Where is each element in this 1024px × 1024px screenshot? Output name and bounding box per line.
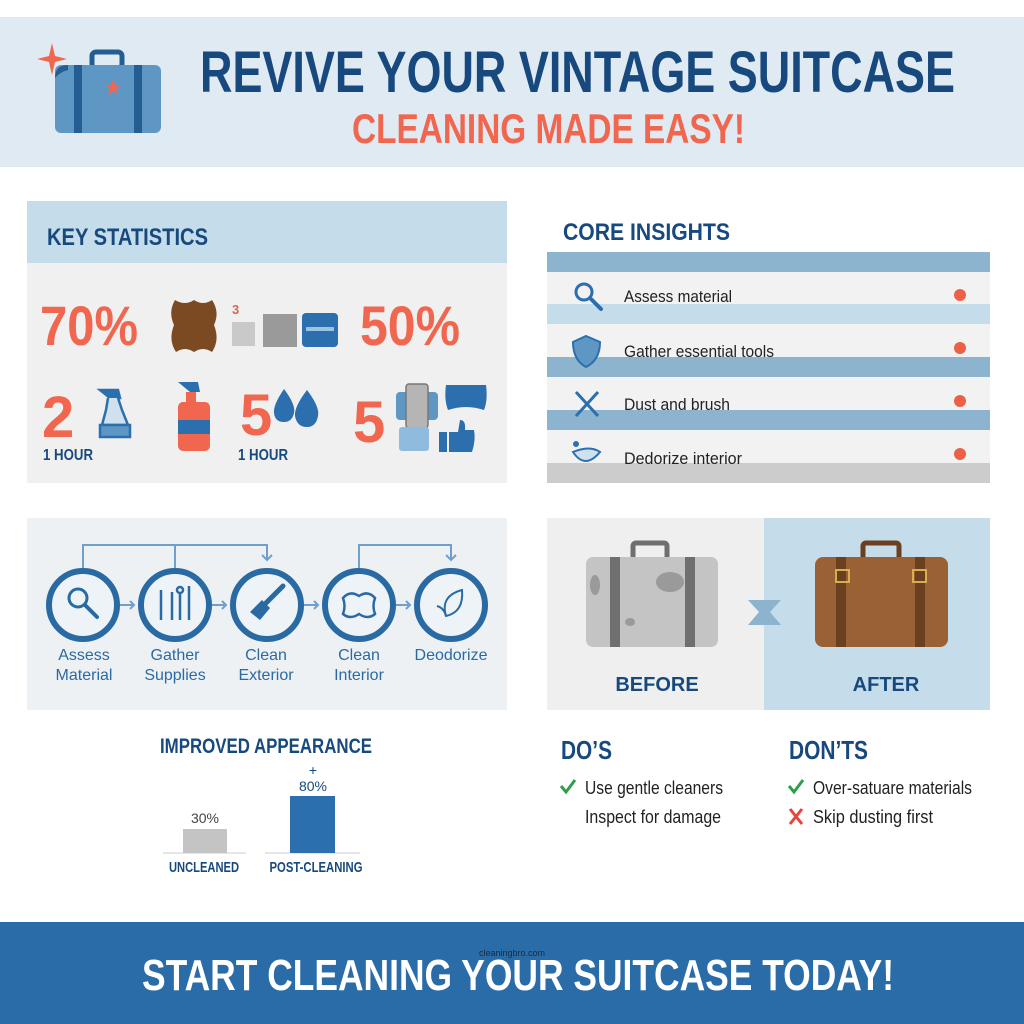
donts list: DON’TS [789,735,868,765]
stat: 2 / 1 hour: 1 HOUR [43,447,93,464]
dos list [561,735,723,827]
subtitle: CLEANING MADE EASY! [352,105,745,152]
chart: improved appearance: 30% [191,810,219,826]
insight: dust and brush [576,392,966,416]
icon: leather and materials [171,300,338,352]
step: clean interior: Interior [334,667,385,684]
step: clean exterior: Clean [245,647,287,664]
step: clean exterior: Exterior [238,667,294,684]
chart: improved appearance: POST-CLEANING [270,859,362,876]
stat: 50%: 50% [360,294,460,357]
stat: 5 tools: 5 [353,390,385,455]
dos list: DO’S [561,735,612,765]
heading: core insights: CORE INSIGHTS [563,219,730,246]
chart: improved appearance: UNCLEANED [169,859,239,876]
stat: 2 / 1 hour [42,385,93,464]
connector arrows [83,545,456,609]
insight: gather tools: Gather essential tools [624,342,774,361]
step: clean interior [325,571,393,684]
stat: 5 / 1 hour [238,383,288,464]
chart: improved appearance: + [309,762,317,778]
donts list: Over-satuare materials [813,778,972,798]
insight: gather tools [573,336,966,367]
heading: key statistics: KEY STATISTICS [47,224,208,251]
step: clean interior: Clean [338,647,380,664]
step: gather supplies: Supplies [144,667,206,684]
insight: dust and brush: Dust and brush [624,395,730,414]
after label: AFTER [853,674,920,696]
chart: improved appearance: 80% [299,778,327,794]
step: assess material: Material [56,667,112,684]
donts list [789,735,972,827]
stat: 5 / 1 hour: 1 HOUR [238,447,288,464]
insight: dedorize interior [573,441,966,468]
footer banner: cleaningbro.com [479,948,545,958]
step: clean exterior [233,571,301,684]
dos list: Inspect for damage [585,807,721,827]
before label: BEFORE [615,674,699,696]
icon: water drops [274,389,318,427]
icon: leather and materials: 3 [232,302,239,317]
stat: 70%: 70% [40,294,138,357]
chart: improved appearance [160,735,372,876]
after suitcase [815,543,948,647]
icon: spray brush [100,390,130,437]
icon: suitcase [37,43,161,133]
panel: process steps [27,518,507,710]
step: assess material: Assess [58,647,110,664]
step: deodorize [415,571,488,664]
panel: key statistics [27,201,507,483]
dos list: Use gentle cleaners [585,778,723,798]
step: deodorize: Deodorize [415,647,488,664]
icon: red spray bottle [178,382,210,451]
insight: assess material [576,284,966,309]
panel: core insights list [547,252,990,483]
chart: improved appearance: IMPROVED APPEARANCE [160,735,372,758]
donts list: Skip dusting first [813,807,933,827]
insight: dedorize interior: Dedorize interior [624,449,742,468]
step: assess material [49,571,117,684]
before suitcase [586,543,718,647]
footer banner [0,922,1024,1024]
stat: 5 / 1 hour: 5 [240,383,272,448]
stat: 2 / 1 hour: 2 [42,385,74,450]
step: gather supplies: Gather [151,647,200,664]
icon: transition arrows [748,600,781,625]
step: gather supplies [141,571,209,684]
icon: sponges and thumbs up [396,384,487,452]
panel: before and after [547,518,990,710]
insight: assess material: Assess material [624,287,732,306]
header band [0,17,1024,167]
